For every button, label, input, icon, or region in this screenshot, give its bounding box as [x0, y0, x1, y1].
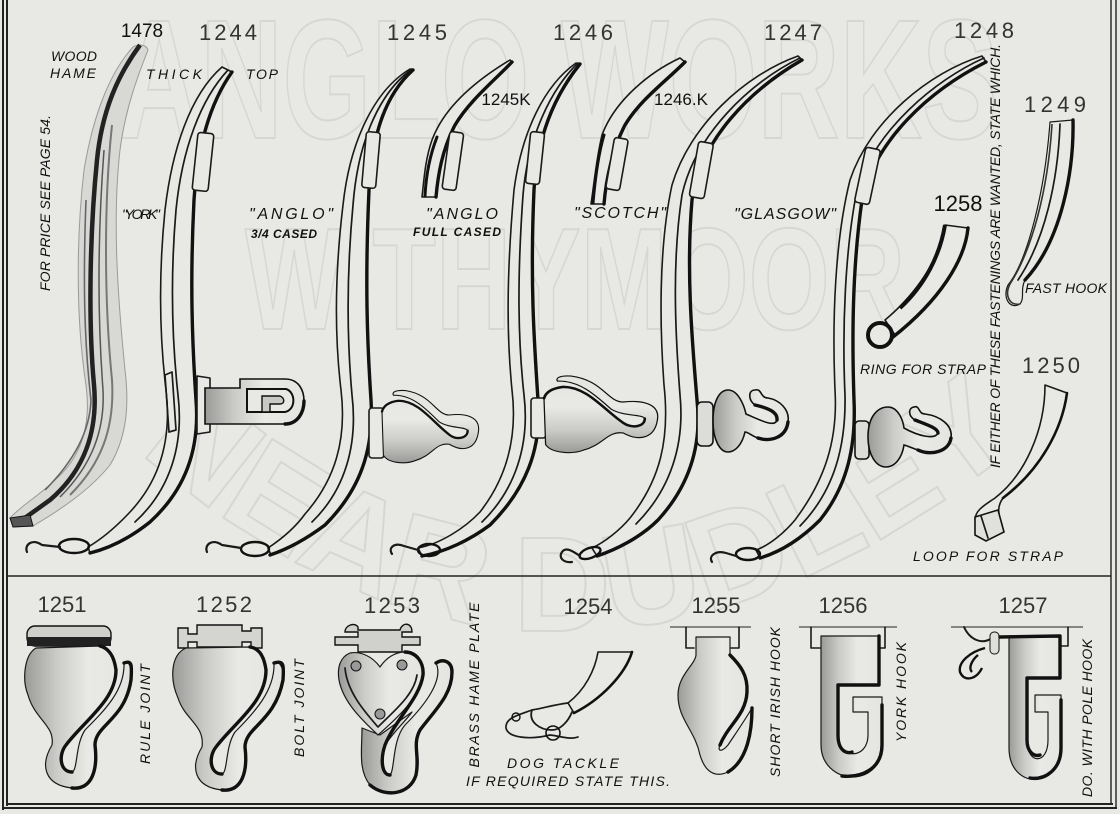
catalogue numbers [38, 18, 1086, 619]
catalogue numbers: 1245K [481, 90, 531, 109]
horizontal labels: "YORK" [122, 206, 161, 222]
horizontal labels: FAST HOOK [1025, 280, 1108, 296]
item 1252 bolt joint plate [173, 625, 283, 790]
catalogue numbers: 1249 [1024, 92, 1086, 117]
horizontal labels: FULL CASED [413, 225, 501, 239]
hame 1245K [422, 60, 512, 197]
watermark: Anglo Works, Withymoor, Near Dudley [118, 0, 998, 632]
item 1253 heart brass hame plate [335, 624, 452, 793]
hame 1247 [561, 56, 802, 562]
horizontal labels: DOG TACKLE [507, 755, 620, 771]
horizontal labels: "GLASGOW" [734, 206, 837, 223]
catalogue numbers: 1252 [196, 592, 252, 617]
catalogue numbers: 1257 [999, 593, 1047, 618]
horizontal labels: "SCOTCH" [574, 205, 667, 222]
watermark: Anglo Works, Withymoor, Near Dudley: NEAR DUDLEY [145, 368, 994, 632]
horizontal labels: LOOP FOR STRAP [913, 548, 1064, 564]
item 1478 wood hame [10, 45, 148, 527]
hame 1244 [26, 67, 304, 553]
catalogue numbers: 1256 [819, 593, 867, 618]
catalogue numbers: 1251 [38, 592, 86, 617]
vertical labels: SHORT IRISH HOOK [767, 626, 783, 777]
hame 1246 [391, 63, 658, 556]
item 1254 dog tackle [506, 652, 632, 740]
catalogue numbers: 1258 [934, 191, 982, 216]
catalogue numbers: 1253 [364, 593, 420, 618]
plate on 1245 [382, 390, 479, 463]
plate on 1248 [855, 407, 951, 467]
catalogue numbers: 1246.K [654, 90, 709, 109]
horizontal labels: HAME [50, 65, 97, 81]
item 1256 York hook [799, 627, 897, 777]
item 1257 Do. with pole hook [951, 627, 1083, 780]
vertical labels: BOLT JOINT [291, 658, 307, 757]
horizontal labels: "ANGLO" [249, 206, 334, 223]
vertical labels: FOR PRICE SEE PAGE 54. [37, 115, 53, 291]
item 1250 loop for strap [975, 385, 1067, 541]
vertical labels: DO. WITH POLE HOOK [1079, 638, 1095, 797]
vertical labels: IF EITHER OF THESE FASTENINGS ARE WANTED, STATE WHICH. [987, 44, 1003, 468]
catalogue numbers: 1254 [564, 594, 612, 619]
catalogue numbers: 1255 [692, 593, 740, 618]
horizontal labels: RING FOR STRAP [860, 361, 987, 377]
catalogue numbers: 1250 [1022, 353, 1080, 378]
catalogue numbers: 1247 [764, 20, 822, 45]
catalogue numbers: 1246 [553, 20, 613, 45]
York hook plate on 1244 [197, 376, 304, 434]
catalogue numbers: 1248 [954, 18, 1014, 43]
hame 1245 [206, 69, 479, 556]
item 1251 rule joint plate [25, 626, 131, 788]
horizontal labels: 3/4 CASED [251, 227, 317, 241]
hame 1248 [711, 56, 986, 562]
horizontal labels: TOP [246, 66, 279, 82]
horizontal labels: "ANGLO [426, 206, 498, 223]
vertical labels: RULE JOINT [137, 663, 153, 764]
item 1249 fast hook [1006, 120, 1073, 306]
vertical labels: YORK HOOK [893, 641, 909, 742]
item 1258 ring for strap [868, 225, 968, 347]
catalogue numbers: 1478 [121, 21, 163, 42]
catalogue numbers: 1245 [387, 20, 447, 45]
hame 1246K [591, 58, 685, 204]
horizontal labels: THICK [146, 66, 203, 82]
horizontal labels: IF REQUIRED STATE THIS. [466, 773, 670, 789]
catalogue numbers: 1244 [199, 20, 257, 45]
vertical labels: BRASS HAME PLATE [466, 602, 482, 768]
plate on 1246 [544, 376, 658, 453]
horizontal labels: WOOD [51, 48, 97, 64]
plate on 1247 [697, 390, 788, 452]
item 1255 short Irish hook [670, 627, 752, 774]
